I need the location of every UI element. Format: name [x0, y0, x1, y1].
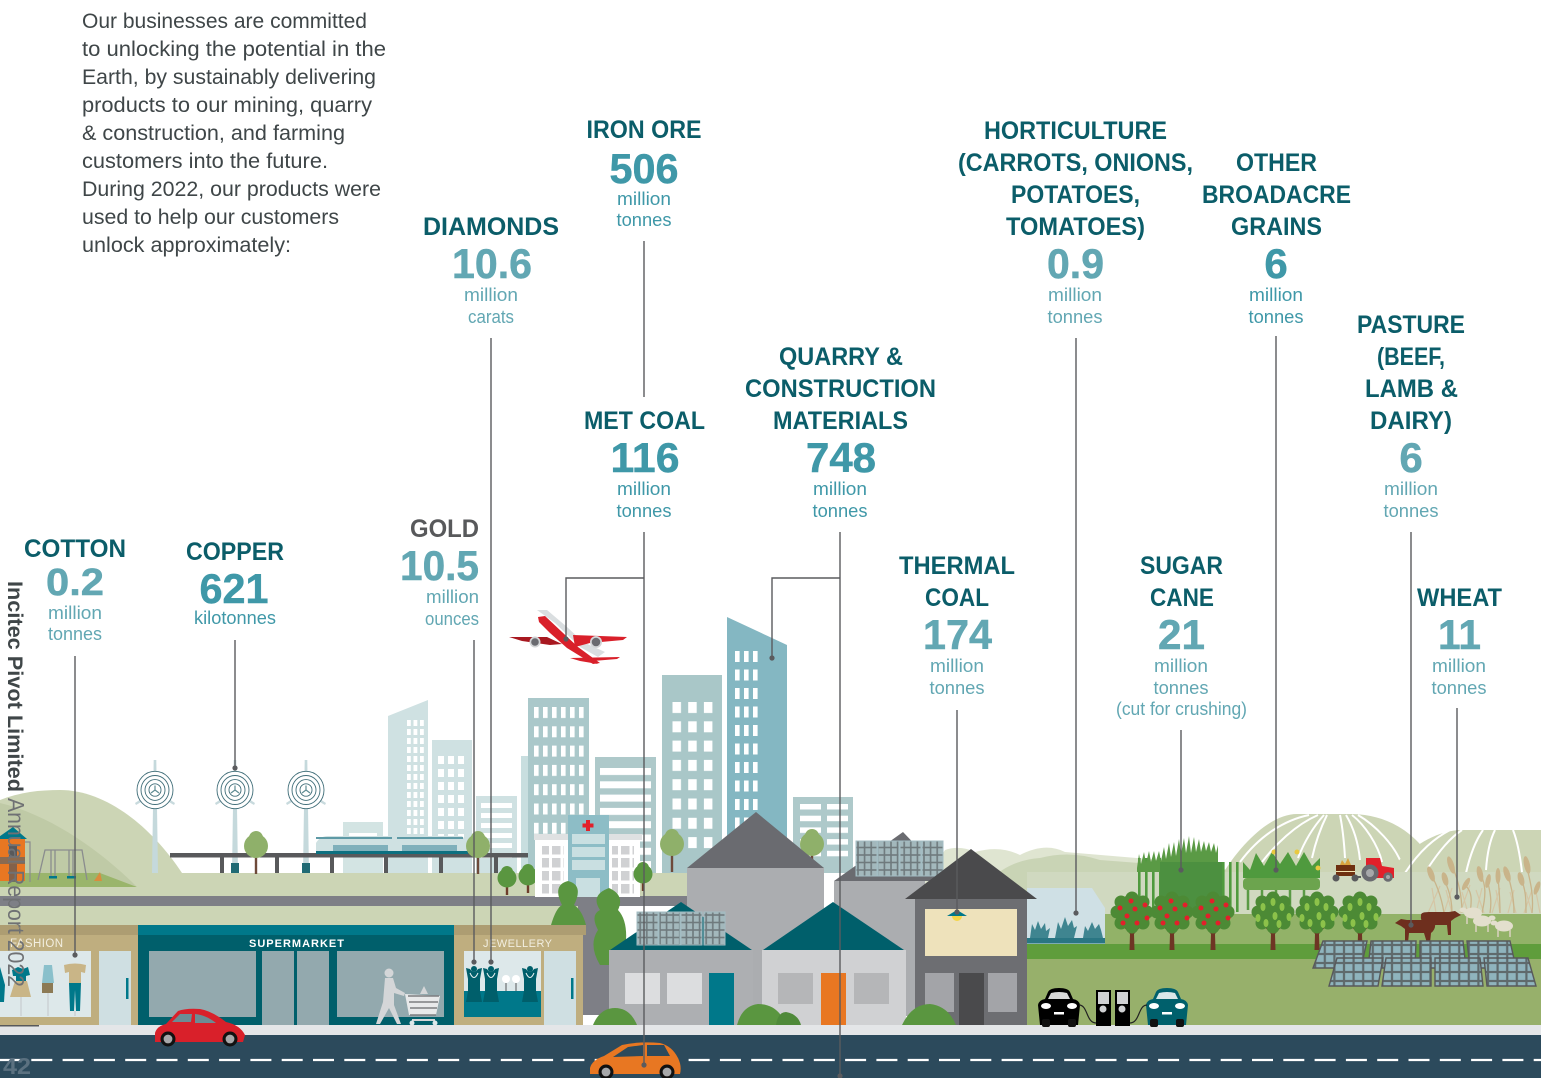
label: quarry and construction materials: tonnes	[812, 500, 868, 521]
intro text: Our businesses are committed	[82, 9, 367, 33]
running footer: rotated report title: Incitec Pivot Limited	[3, 581, 26, 792]
dark house with lit window	[905, 849, 1037, 1025]
label: quarry and construction materials: million	[813, 478, 867, 499]
intro text: Earth, by sustainably delivering	[82, 65, 376, 89]
elevated train line	[170, 836, 528, 873]
label: gold: ounces	[425, 608, 479, 629]
label: gold: 10.5	[400, 542, 479, 589]
label: iron ore: 506	[610, 145, 678, 192]
leader line: met coal	[563, 532, 647, 1068]
label: thermal coal: COAL	[925, 584, 989, 612]
leader line: wheat	[1454, 708, 1460, 900]
playground	[0, 827, 102, 882]
label: quarry and construction materials: QUARRY &	[779, 343, 903, 371]
storefront: jewellery: JEWELLERY	[483, 938, 553, 950]
leader line: cotton	[72, 656, 78, 958]
label: cotton: tonnes	[48, 623, 102, 644]
label: diamonds	[423, 213, 559, 327]
label: other broadacre grains: million	[1249, 284, 1303, 305]
label: cotton: COTTON	[24, 535, 126, 563]
leader line: copper	[232, 640, 238, 771]
label: diamonds: 10.6	[452, 240, 532, 287]
tractor	[1332, 858, 1394, 882]
solar farm	[1313, 941, 1536, 986]
label: pasture: LAMB &	[1365, 375, 1458, 403]
label: met coal: million	[617, 478, 671, 499]
label: diamonds: DIAMONDS	[423, 213, 559, 241]
intro text: to unlocking the potential in the	[82, 37, 386, 61]
label: quarry and construction materials: CONSTRUCTION	[745, 375, 936, 403]
red car	[155, 1009, 245, 1046]
label: copper: 621	[200, 565, 268, 612]
intro text: products to our mining, quarry	[82, 93, 372, 117]
wheat	[1425, 856, 1541, 913]
label: cotton	[24, 535, 126, 644]
label: cotton: million	[48, 602, 102, 623]
label: copper	[186, 538, 284, 628]
apple trees	[1110, 892, 1234, 950]
label: gold: million	[426, 586, 479, 607]
label: other broadacre grains: tonnes	[1248, 306, 1304, 327]
leader line: iron ore	[643, 241, 645, 397]
leader line: sugar cane	[1178, 730, 1184, 873]
storefront: fashion	[0, 925, 138, 1025]
house with orange door	[762, 902, 906, 1025]
aeroplane	[509, 610, 627, 664]
label: gold	[400, 515, 479, 629]
label: thermal coal: million	[930, 655, 984, 676]
label: pasture	[1357, 311, 1465, 521]
intro text: unlock approximately:	[82, 233, 291, 257]
label: pasture: (BEEF,	[1377, 343, 1445, 371]
wind turbines	[135, 760, 326, 873]
EV charging: cars and pumps	[1038, 988, 1188, 1027]
storefront: jewellery	[454, 925, 586, 1025]
intro text: used to help our customers	[82, 205, 339, 229]
rounded farm hills with furrows	[1222, 814, 1541, 914]
label: other broadacre grains: 6	[1264, 240, 1288, 287]
label: pasture: PASTURE	[1357, 311, 1465, 339]
livestock	[1395, 908, 1513, 943]
shopper with trolley	[376, 968, 440, 1026]
label: horticulture: 0.9	[1047, 240, 1104, 287]
right background: faint hills and ground	[925, 848, 1541, 914]
label: iron ore: million	[617, 188, 671, 209]
label: wheat	[1417, 584, 1502, 698]
label: sugar cane: CANE	[1150, 584, 1214, 612]
clothing display	[0, 964, 86, 1016]
storefront: fashion: FASHION	[10, 938, 63, 950]
footer rule	[0, 1025, 39, 1026]
label: quarry and construction materials: MATERIALS	[773, 407, 908, 435]
front bushes	[593, 1004, 956, 1025]
label: quarry and construction materials: 748	[806, 434, 876, 481]
label: gold: GOLD	[410, 515, 479, 543]
label: cotton: 0.2	[46, 562, 104, 604]
leader line: other broadacre grains	[1273, 336, 1279, 873]
intro text: During 2022, our products were	[82, 177, 381, 201]
label: quarry and construction materials	[745, 343, 936, 521]
label: wheat: 11	[1438, 611, 1481, 658]
label: thermal coal: THERMAL	[899, 552, 1015, 580]
intro text: customers into the future.	[82, 149, 328, 173]
leader line: horticulture	[1073, 338, 1079, 916]
label: pasture: million	[1384, 478, 1438, 499]
running footer: rotated report title: Annual Report 2022	[3, 798, 29, 987]
label: wheat: WHEAT	[1417, 584, 1502, 612]
label: sugar cane: (cut for crushing)	[1116, 698, 1247, 719]
leader line: quarry and construction	[769, 532, 843, 1078]
label: sugar cane: SUGAR	[1140, 552, 1223, 580]
label: pasture: DAIRY)	[1370, 407, 1452, 435]
label: horticulture: tonnes	[1048, 306, 1102, 327]
leader line: thermal coal	[954, 710, 960, 915]
light trees behind houses	[660, 829, 824, 872]
sugar cane crop	[1137, 836, 1241, 912]
label: pasture: 6	[1399, 434, 1423, 481]
label: thermal coal	[899, 552, 1015, 698]
hospital	[534, 815, 652, 897]
label: thermal coal: tonnes	[930, 677, 984, 698]
label: wheat: million	[1432, 655, 1486, 676]
label: horticulture: million	[1048, 284, 1102, 305]
grey back house with solar	[834, 832, 950, 1016]
label: wheat: tonnes	[1432, 677, 1486, 698]
field	[1027, 914, 1541, 1025]
house with teal door	[609, 902, 753, 1025]
pear trees	[1252, 892, 1382, 950]
orange car	[590, 1042, 681, 1078]
label: other broadacre grains: GRAINS	[1231, 213, 1322, 241]
skyline buildings	[343, 617, 853, 873]
label: horticulture: POTATOES,	[1011, 181, 1140, 209]
label: met coal: tonnes	[616, 500, 672, 521]
label: diamonds: million	[464, 284, 518, 305]
label: other broadacre grains	[1202, 149, 1351, 327]
label: horticulture: HORTICULTURE	[984, 117, 1167, 145]
houses group	[609, 812, 1037, 1025]
pavement and road	[0, 1025, 1541, 1078]
label: sugar cane: tonnes	[1154, 677, 1208, 698]
label: met coal: MET COAL	[584, 407, 705, 435]
leader line: pasture	[1408, 532, 1414, 928]
label: sugar cane	[1116, 552, 1247, 719]
middle ground bands	[0, 873, 726, 1015]
greenhouse	[1027, 888, 1105, 944]
silo tower	[687, 812, 824, 1025]
label: horticulture	[958, 117, 1193, 327]
label: sugar cane: million	[1154, 655, 1208, 676]
label: iron ore	[586, 116, 702, 230]
intro text: & construction, and farming	[82, 121, 345, 145]
leader line: diamonds	[488, 338, 494, 965]
label: iron ore: IRON ORE	[586, 116, 702, 144]
intro text	[82, 9, 386, 257]
label: met coal	[584, 407, 705, 521]
corn crop	[1243, 850, 1320, 910]
label: met coal: 116	[610, 434, 680, 481]
label: horticulture: (CARROTS, ONIONS,	[958, 149, 1193, 177]
label: other broadacre grains: BROADACRE	[1202, 181, 1351, 209]
bushes by road	[551, 881, 626, 965]
label: other broadacre grains: OTHER	[1236, 149, 1317, 177]
label: copper: COPPER	[186, 538, 284, 566]
leader line: gold	[471, 640, 477, 965]
label: iron ore: tonnes	[616, 209, 672, 230]
background hills, left	[0, 790, 182, 890]
running footer: rotated report title	[3, 581, 29, 987]
trees on rise	[244, 831, 538, 895]
label: copper: kilotonnes	[194, 607, 276, 628]
label: thermal coal: 174	[923, 611, 993, 658]
storefront: supermarket: SUPERMARKET	[249, 938, 344, 950]
label: horticulture: TOMATOES)	[1006, 213, 1145, 241]
label: pasture: tonnes	[1384, 500, 1438, 521]
label: sugar cane: 21	[1158, 611, 1205, 658]
storefront: supermarket	[138, 925, 454, 1026]
label: diamonds: carats	[468, 306, 514, 327]
